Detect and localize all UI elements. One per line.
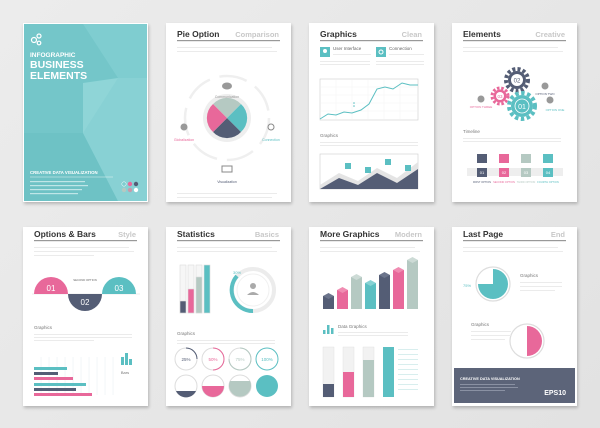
percentage circles: 75% xyxy=(235,357,245,362)
panel: more graphics: Data Graphics xyxy=(338,324,368,329)
icon: connection xyxy=(376,47,386,57)
timeline: SECOND OPTION xyxy=(493,180,515,184)
options semicircles: 02 xyxy=(81,298,90,307)
timeline xyxy=(467,154,563,184)
footer: EPS10 xyxy=(544,390,566,397)
vertical bars xyxy=(180,265,210,313)
pie 75%: Graphics xyxy=(520,273,539,278)
heading: Basics xyxy=(255,230,279,239)
cover title: BUSINESS xyxy=(30,59,84,71)
panel: cover xyxy=(23,23,148,202)
pie 75% xyxy=(463,267,562,301)
heading xyxy=(463,229,566,241)
timeline: FIRST OPTION xyxy=(473,180,491,184)
fill circles xyxy=(175,375,278,397)
panel: graphics: User Interface xyxy=(333,46,362,51)
gears: 01 xyxy=(518,104,526,111)
panel: options & bars: Bars xyxy=(121,370,129,375)
heading: More Graphics xyxy=(320,229,380,239)
footer: CREATIVE DATA VISUALIZATION xyxy=(460,377,520,381)
panel: statistics: Graphics xyxy=(177,331,196,336)
timeline: FOURTH OPTION xyxy=(537,180,559,184)
percentage circles xyxy=(175,348,278,370)
pie 75%: 75% xyxy=(463,283,471,288)
panel: pie option: Communication xyxy=(215,95,239,99)
options semicircles xyxy=(32,277,140,311)
pie chart xyxy=(185,76,269,160)
cover title: INFOGRAPHIC xyxy=(30,52,76,59)
line chart xyxy=(320,79,418,120)
timeline: 01 xyxy=(480,170,485,175)
ring chart: 30% xyxy=(233,270,241,275)
heading: Graphics xyxy=(320,29,357,39)
heading xyxy=(177,29,280,41)
percentage circles: 25% xyxy=(181,357,191,362)
icon: gears xyxy=(32,34,41,45)
panel: options & bars xyxy=(23,227,148,406)
panel: pie option: Visualization xyxy=(217,180,237,184)
options semicircles: SECOND OPTION xyxy=(73,278,97,282)
panel: pie option: Globalization xyxy=(174,138,194,142)
tall isometric bars xyxy=(323,347,394,397)
gears: 03 xyxy=(497,94,503,99)
heading: End xyxy=(551,230,565,239)
pie 50%: 50% xyxy=(523,367,531,372)
heading: Modern xyxy=(395,230,422,239)
isometric bar chart xyxy=(323,257,418,309)
area chart xyxy=(320,154,418,189)
panel: graphics xyxy=(309,23,434,202)
gears: OPTION THREE xyxy=(470,105,492,109)
panel: graphics: Graphics xyxy=(320,133,339,138)
pie 50% xyxy=(471,322,544,372)
heading: Statistics xyxy=(177,229,215,239)
percentage circles: 50% xyxy=(208,357,218,362)
panel: elements xyxy=(452,23,577,202)
panel: elements: Timeline xyxy=(463,129,480,134)
heading: Options & Bars xyxy=(34,229,96,239)
heading: Last Page xyxy=(463,229,503,239)
horizontal bar chart xyxy=(34,357,113,396)
panel: pie option: Connection xyxy=(262,138,280,142)
footer xyxy=(454,368,575,403)
heading: Elements xyxy=(463,29,501,39)
heading xyxy=(320,229,423,241)
legend lines xyxy=(398,349,418,390)
panel: options & bars: Graphics xyxy=(34,325,53,330)
icon: data graphics xyxy=(323,325,334,334)
heading: Pie Option xyxy=(177,29,220,39)
gears: OPTION ONE xyxy=(546,108,564,112)
cover title xyxy=(30,52,87,82)
panel: statistics xyxy=(166,227,291,406)
heading xyxy=(320,29,423,41)
icons around pie xyxy=(180,82,274,172)
heading xyxy=(177,229,280,241)
gears xyxy=(470,69,564,119)
heading: Comparison xyxy=(235,30,279,39)
timeline: THIRD OPTION xyxy=(517,180,535,184)
panel: graphics: Connection xyxy=(389,46,412,51)
gears: OPTION TWO xyxy=(535,92,555,96)
timeline: 04 xyxy=(546,170,551,175)
pie 50%: Graphics xyxy=(471,322,490,327)
options semicircles: 03 xyxy=(115,284,124,293)
color swatches xyxy=(122,182,138,192)
panel: last page xyxy=(452,227,577,406)
heading: Creative xyxy=(535,30,565,39)
panel: pie option xyxy=(166,23,291,202)
gears: 02 xyxy=(514,78,521,84)
cover subtitle: CREATIVE DATA VISUALIZATION xyxy=(30,170,98,175)
heading xyxy=(463,29,566,41)
options semicircles: 01 xyxy=(47,284,56,293)
ring chart xyxy=(232,269,274,311)
panel: more graphics xyxy=(309,227,434,406)
percentage circles: 100% xyxy=(261,357,273,362)
timeline: 03 xyxy=(524,170,529,175)
cover title: ELEMENTS xyxy=(30,70,87,82)
heading xyxy=(34,229,137,241)
heading: Clean xyxy=(402,30,422,39)
heading: Style xyxy=(118,230,136,239)
icon: bars xyxy=(121,353,132,365)
timeline: 02 xyxy=(502,170,507,175)
icon: user xyxy=(320,47,330,57)
